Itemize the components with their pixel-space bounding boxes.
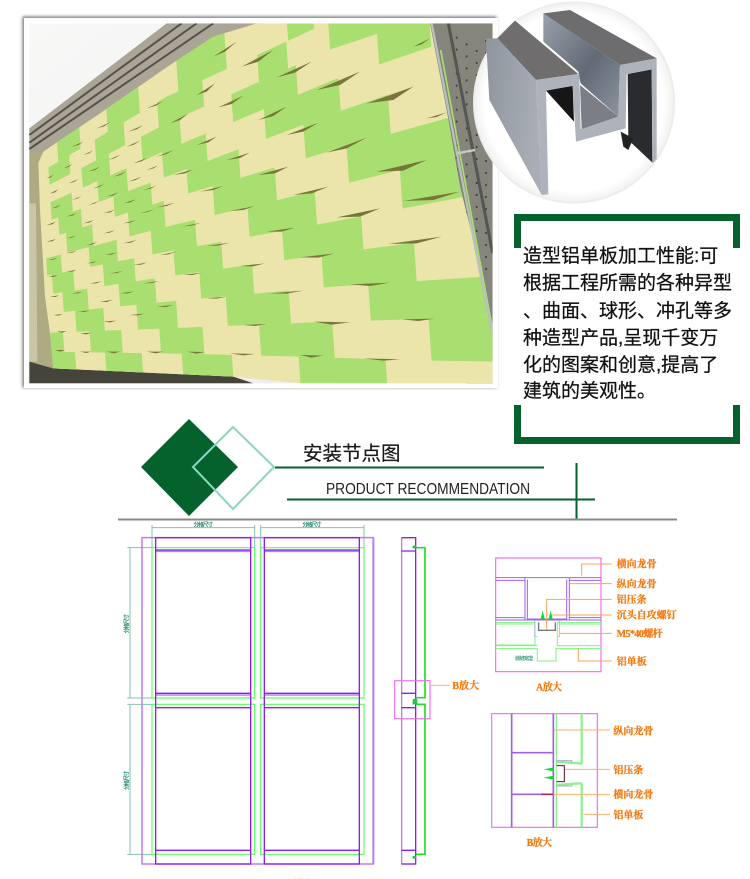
light purple frame: [142, 538, 373, 864]
description text: 建筑的美观性。: [523, 380, 656, 402]
keels: [512, 714, 553, 827]
labels: 铝单板: [617, 655, 647, 668]
detail A: enlarged joint: [496, 558, 677, 693]
dark purple keel: [156, 538, 359, 864]
labels: B放大: [527, 836, 552, 849]
labels: 纵向龙骨: [617, 577, 657, 590]
dimension lines: [127, 525, 364, 854]
photo frame: woven aluminium panel facade: [20, 14, 499, 390]
wall weave: [38, 24, 492, 384]
description text: 根据工程所需的各种异型: [523, 272, 732, 294]
labels: A放大: [536, 680, 562, 693]
gap label: 嵌缝宽度: [515, 654, 534, 662]
labels: [536, 558, 677, 693]
description text: [523, 245, 732, 402]
labels: 沉头自攻螺钉: [617, 609, 677, 622]
detail B boundary: [492, 714, 597, 827]
detail B: enlarged joint: [492, 714, 653, 849]
heading text: 安装节点图: [303, 443, 401, 465]
circular inset: U-channel aluminium profile: [473, 2, 675, 204]
icon: overlapping diamonds: [141, 419, 274, 516]
green panel outlines: [152, 548, 364, 854]
labels: 铝压条: [613, 764, 643, 777]
description text: 造型铝单板加工性能:可: [523, 245, 718, 267]
callout: forming performance text box: [514, 214, 740, 444]
dimension labels: 分格尺寸: [123, 770, 131, 790]
callout box B: [395, 681, 430, 719]
dimension labels: [123, 521, 322, 790]
section heading: installation node diagram: [118, 419, 677, 520]
pressing strip: [557, 766, 564, 782]
labels: 横向龙骨: [617, 558, 657, 571]
dimension labels: 分格尺寸: [123, 614, 131, 633]
leader lines: [547, 564, 612, 661]
labels: 纵向龙骨: [613, 724, 653, 737]
elevation drawing: panel layout: [123, 521, 373, 864]
description text: 、曲面、球形、冲孔等多: [523, 300, 732, 322]
dimension labels: 分格尺寸: [302, 521, 322, 529]
screws: [543, 767, 554, 780]
label: B enlarged: B放大: [452, 679, 479, 692]
labels: M5*40螺杆: [617, 627, 663, 640]
dimension labels: 分格尺寸: [194, 521, 213, 529]
green corner brackets: [514, 214, 740, 444]
labels: 铝压条: [617, 593, 647, 606]
leader lines: [553, 730, 610, 814]
photo: building facade: [29, 23, 493, 384]
description text: 化的图案和创意,提高了: [523, 354, 718, 376]
panels: [496, 622, 601, 661]
labels: [527, 724, 653, 849]
profile drawing: [486, 10, 657, 195]
subheading text: PRODUCT RECOMMENDATION: [326, 481, 530, 498]
detail A boundary: [496, 558, 601, 672]
screws: [541, 611, 553, 619]
panels: [555, 714, 558, 827]
labels: 横向龙骨: [613, 788, 653, 801]
description text: 种造型产品,呈现千变万: [523, 327, 718, 349]
keels: [496, 578, 601, 620]
section drawing: side view: [395, 538, 479, 864]
labels: 铝单板: [613, 809, 643, 822]
